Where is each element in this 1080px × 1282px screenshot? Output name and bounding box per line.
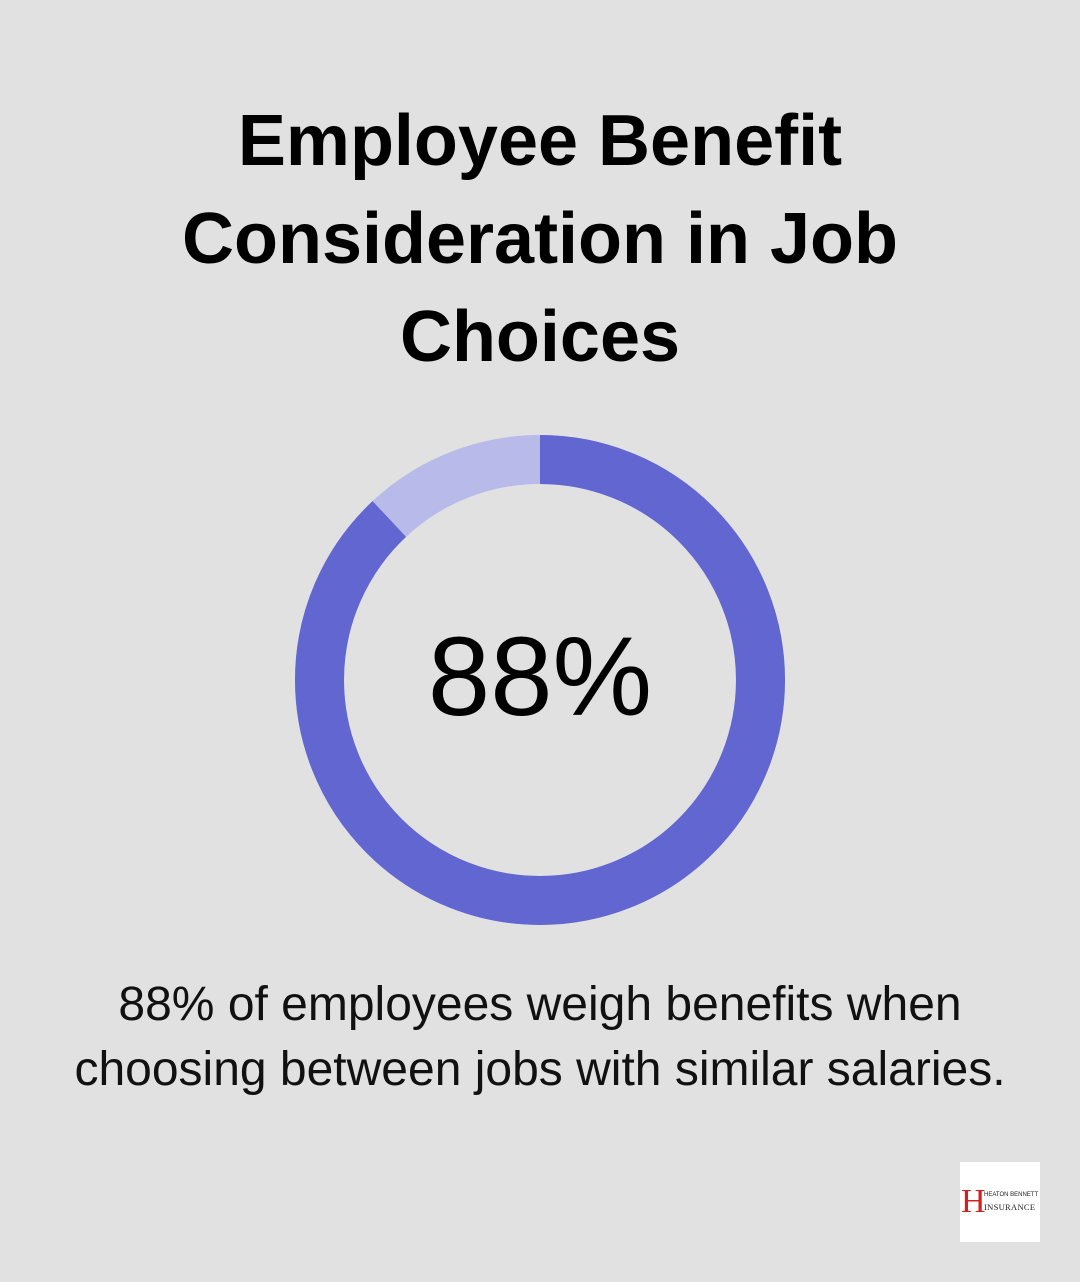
logo: HEATON BENNETT: [984, 1192, 1038, 1198]
logo: INSURANCE: [984, 1202, 1035, 1212]
logo: [960, 1162, 1040, 1242]
title: Employee Benefit: [238, 101, 842, 181]
logo: H: [961, 1183, 986, 1220]
caption: choosing between jobs with similar salaries.: [74, 1043, 1006, 1096]
88% segment: [320, 460, 760, 900]
caption: 88% of employees weigh benefits when: [118, 978, 962, 1031]
center value: 88%: [428, 614, 652, 739]
caption: [74, 978, 1006, 1096]
title: Consideration in Job: [182, 199, 898, 279]
remaining segment: [320, 460, 760, 900]
title: Choices: [400, 297, 680, 377]
title: [182, 101, 898, 377]
